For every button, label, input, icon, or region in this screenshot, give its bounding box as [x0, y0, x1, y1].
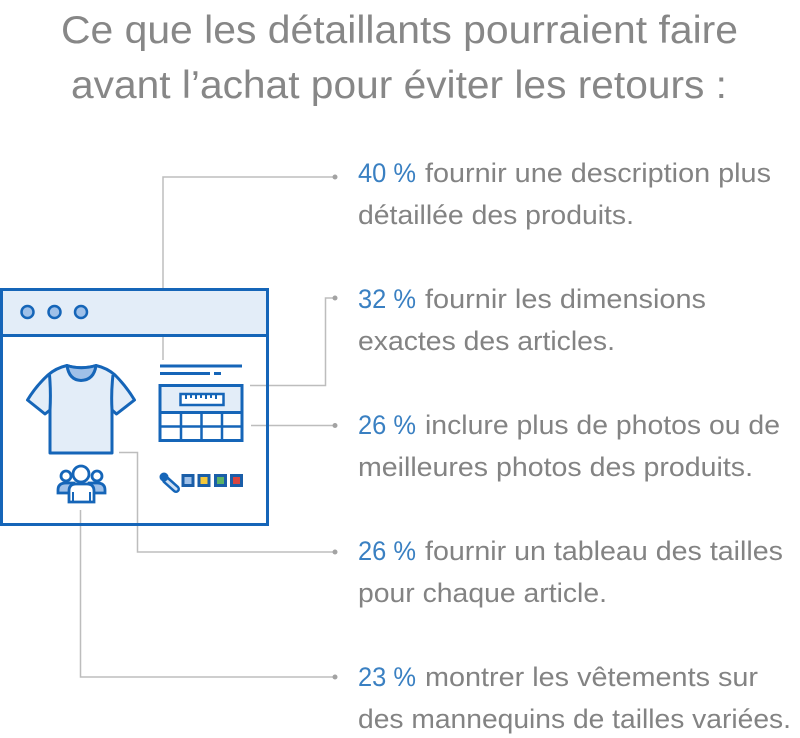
text: 32 %: exactes des articles.	[358, 326, 615, 356]
text: 32 %: fournir les dimensions	[425, 284, 706, 314]
connector: photos	[251, 423, 338, 428]
title: avant l’achat pour éviter les retours :	[71, 64, 727, 107]
title: Ce que les détaillants pourraient faire	[61, 9, 738, 52]
connector: dimensions	[250, 296, 338, 386]
icon: eyedropper	[160, 472, 176, 489]
text: 40 %: détaillée des produits.	[358, 200, 634, 230]
connector: models	[80, 510, 338, 680]
browser window illustration	[2, 290, 268, 524]
text: 23 %: des mannequins de tailles variées.	[358, 704, 791, 734]
browser window frame	[2, 290, 268, 524]
icon: group of people	[58, 466, 105, 502]
icon: colour swatches with eyedropper	[160, 472, 242, 489]
text: 23 %: 23 %	[358, 662, 416, 692]
icon: text lines	[160, 364, 242, 375]
connector: description	[163, 174, 338, 360]
text: 40 %: 40 %	[358, 158, 416, 188]
text: 26 % size chart	[358, 536, 783, 608]
browser title bar	[2, 290, 268, 336]
text: 26 % size chart: 26 %	[358, 536, 416, 566]
text: 26 % photos: 26 %	[358, 410, 416, 440]
text: 26 % size chart: pour chaque article.	[358, 578, 607, 608]
icon: size table with ruler	[160, 386, 242, 441]
text: 32 %	[358, 284, 706, 356]
title	[61, 9, 738, 107]
text: 32 %: 32 %	[358, 284, 416, 314]
text: 23 %: montrer les vêtements sur	[425, 662, 758, 692]
text: 26 % photos	[358, 410, 780, 482]
icon: t-shirt	[28, 366, 134, 453]
text: 40 %: fournir une description plus	[425, 158, 771, 188]
text: 23 %	[358, 662, 791, 734]
text: 26 % photos: meilleures photos des produits.	[358, 452, 753, 482]
connector: size chart	[119, 452, 338, 554]
text: 40 %	[358, 158, 771, 230]
text: 26 % size chart: fournir un tableau des tailles	[425, 536, 783, 566]
text: 26 % photos: inclure plus de photos ou de	[425, 410, 780, 440]
